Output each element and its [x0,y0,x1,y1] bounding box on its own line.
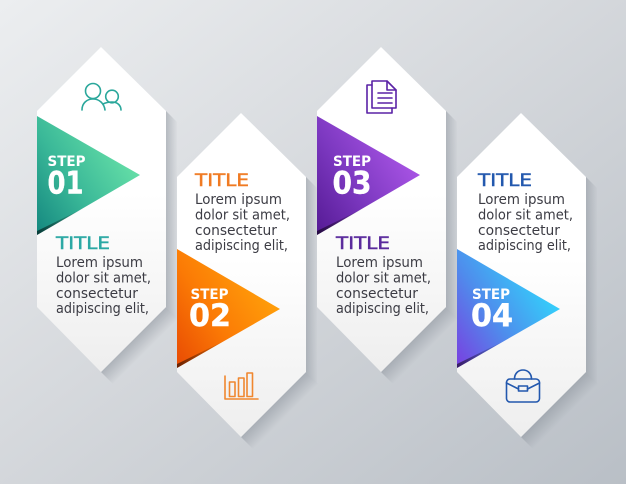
body text 3: dolor sit amet, [336,270,431,286]
icon: briefcase [506,370,540,402]
body text 4 [478,192,573,254]
title 1: TITLE [55,234,110,253]
triangle arrow 4 [457,249,560,368]
step label 1: STEP [48,154,86,170]
step number 3: 03 [332,166,372,202]
body text 4: Lorem ipsum [478,192,565,208]
step number 4: 04 [471,298,513,334]
body text 1: Lorem ipsum [56,255,143,271]
body text 2: dolor sit amet, [195,208,290,224]
body text 4: consectetur [478,223,560,239]
card 4 [457,113,586,437]
panel: step 1 [37,47,178,384]
body text 3: adipiscing elit, [336,301,429,317]
card shadow 4 [521,177,598,449]
triangle arrow 1 [37,116,140,235]
title 4: TITLE [477,171,532,190]
panel: step 3 [317,47,458,384]
body text 1: consectetur [56,286,138,302]
step label 4: STEP [472,287,510,303]
step number 2: 02 [189,298,231,334]
body text 3: consectetur [336,286,418,302]
triangle arrow 3 [317,116,420,235]
icon: documents [367,81,396,113]
body text 4: dolor sit amet, [478,208,573,224]
panel: step 4 [457,113,598,449]
body text 1 [56,255,151,317]
icon: people [82,84,121,110]
card shadow 1 [101,111,178,384]
title 2: TITLE [194,171,249,190]
body text 3 [336,255,431,317]
body text 2: consectetur [195,223,277,239]
step label 2: STEP [190,287,228,303]
card 1 [37,47,166,372]
triangle arrow 2 [177,249,280,368]
icon: bar chart [225,373,258,399]
panel: step 2 [177,113,318,449]
body text 4: adipiscing elit, [478,238,571,254]
card 2 [177,113,306,437]
card shadow 3 [381,111,458,384]
body text 2 [195,192,290,254]
step label 3: STEP [333,154,371,170]
body text 2: adipiscing elit, [195,238,288,254]
body text 1: adipiscing elit, [56,301,149,317]
card 3 [317,47,446,372]
step number 1: 01 [48,166,84,202]
body text 3: Lorem ipsum [336,255,423,271]
card shadow 2 [241,177,318,449]
title 3: TITLE [335,234,390,253]
body text 1: dolor sit amet, [56,270,151,286]
body text 2: Lorem ipsum [195,192,282,208]
